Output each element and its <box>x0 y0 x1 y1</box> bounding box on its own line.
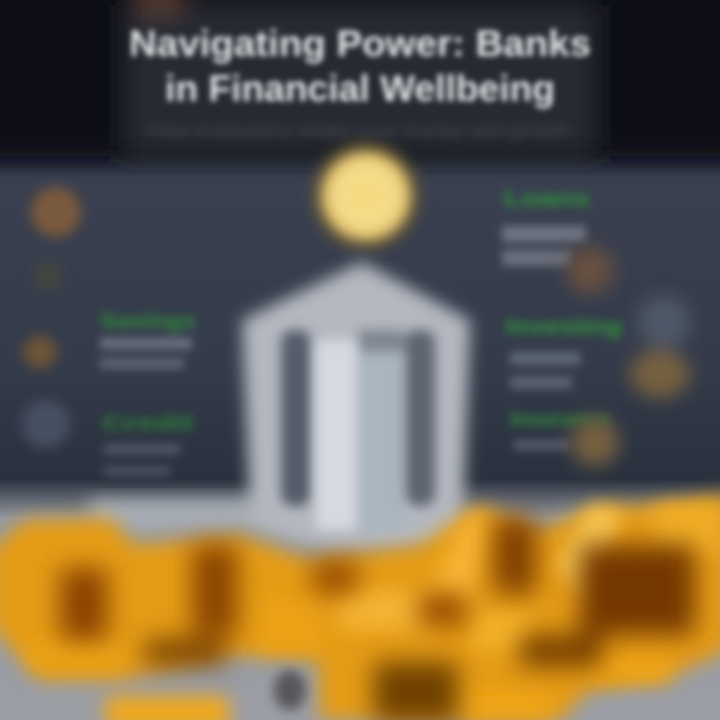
icon: brown coins middle <box>630 350 690 398</box>
callout: lower left: Credit <box>102 412 194 435</box>
gold bars <box>0 495 720 720</box>
header band <box>0 0 720 156</box>
callout: upper right: Loans <box>504 186 590 211</box>
callout: lower left <box>102 412 194 476</box>
gold base <box>0 495 720 720</box>
callout: middle right <box>506 314 622 389</box>
icon: orange medallion <box>31 187 81 237</box>
title: Navigating Power: Banks <box>129 23 591 64</box>
title: in Financial Wellbeing <box>165 68 555 109</box>
callout: lower right: Insurance <box>510 409 610 431</box>
left callouts <box>100 310 196 476</box>
left column icons <box>22 187 81 448</box>
callout: middle right: Investing <box>506 314 622 339</box>
icon: brown coins lower <box>571 418 619 466</box>
callout: upper right <box>502 186 590 266</box>
bank centre column <box>316 340 356 530</box>
right column icons <box>566 246 690 466</box>
icon: gold coin <box>310 140 422 252</box>
icon: grey figure <box>638 296 690 348</box>
subtitle: How institutions shape your money and growth <box>150 123 570 140</box>
bank roof and body <box>242 262 470 552</box>
icon: grey badge <box>22 400 70 448</box>
bank inner windows <box>281 330 435 530</box>
right callouts <box>502 186 622 450</box>
icon: small brown marker <box>34 262 62 290</box>
icon: bank building <box>242 262 470 552</box>
callout: upper left <box>100 310 196 369</box>
icon: brown coins upper <box>566 246 614 294</box>
callout: upper left: Savings <box>100 310 196 333</box>
title <box>129 23 591 109</box>
gold highlights <box>30 505 720 720</box>
icon: orange badge <box>23 335 57 369</box>
floor highlight <box>90 500 270 530</box>
floor shadow <box>274 670 306 710</box>
gold shadows <box>60 518 695 720</box>
callout: lower right <box>510 409 610 450</box>
